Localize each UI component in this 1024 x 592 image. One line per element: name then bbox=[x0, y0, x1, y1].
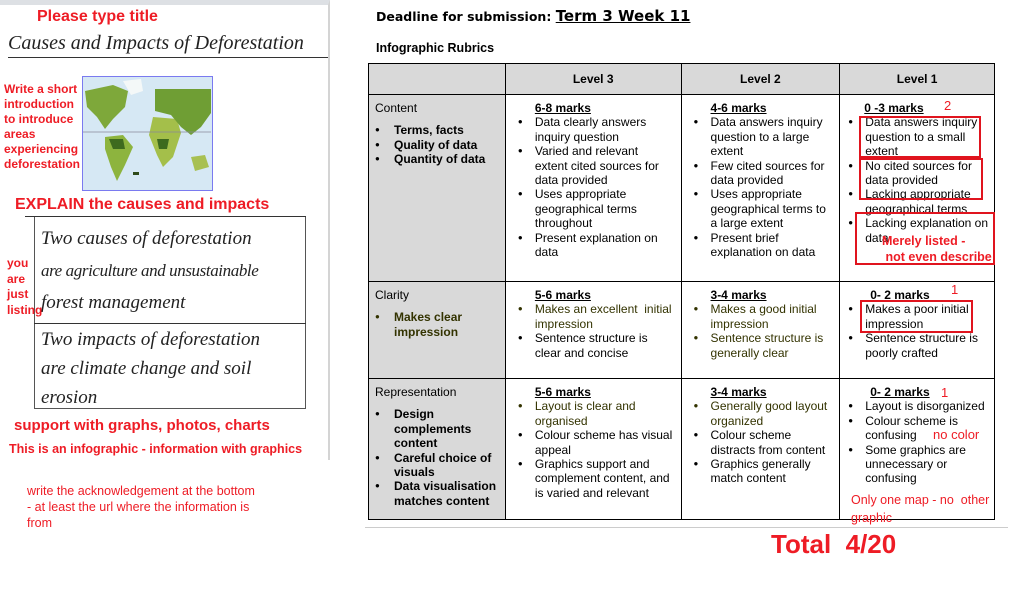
rubric table: Colour scheme has visual appeal bbox=[535, 428, 672, 457]
rubric table: Careful choice of visuals bbox=[394, 451, 491, 479]
rubric table: Data visualisation matches content bbox=[394, 479, 496, 508]
rubric table: Present explanation on data bbox=[535, 231, 658, 259]
rubric table: 3-4 marks bbox=[711, 385, 767, 399]
rubric table: 0- 2 marks bbox=[870, 385, 930, 399]
rubric table: Generally good layout organized bbox=[711, 399, 827, 428]
rubric table: Quantity of data bbox=[394, 152, 485, 166]
comment: you are just listing: listing bbox=[7, 302, 42, 316]
annotation: merely listed: not even describe bbox=[885, 250, 992, 264]
rubric table: Design complements content bbox=[394, 407, 471, 450]
rubric table: Data answers inquiry question to a large extent bbox=[711, 115, 823, 158]
handwritten impacts text: erosion bbox=[41, 387, 97, 408]
total score: Total 4/20 bbox=[771, 529, 896, 559]
rubric table: Layout is clear and organised bbox=[535, 399, 636, 428]
rubric table: Makes a good initial impression bbox=[711, 302, 817, 331]
instruction: introduction: Write a short bbox=[4, 82, 77, 96]
rubric table: 5-6 marks bbox=[535, 385, 591, 399]
annotation: merely listed bbox=[882, 234, 992, 264]
text: 1 bbox=[941, 385, 948, 400]
rubric table: Data clearly answers inquiry question bbox=[535, 115, 646, 144]
handwritten impacts text bbox=[41, 329, 260, 408]
rubric table: Layout is disorganized bbox=[865, 399, 985, 413]
rubric table: Clarity bbox=[375, 288, 409, 302]
handwritten causes text bbox=[41, 228, 258, 313]
handwritten causes text: are agriculture and unsustainable bbox=[41, 261, 258, 280]
rubric table: Makes a poor initial impression bbox=[865, 302, 969, 331]
rubric table: Sentence structure is poorly crafted bbox=[865, 331, 978, 360]
comment: you are just listing: you bbox=[7, 256, 28, 270]
handwritten causes and impacts box bbox=[25, 216, 306, 409]
rubric table: Level 3 bbox=[573, 72, 614, 86]
instruction: acknowledgement bbox=[27, 484, 255, 530]
rubric table: Lacking appropriate geographical terms bbox=[865, 187, 971, 216]
handwritten title bbox=[8, 28, 328, 58]
handwritten title: Causes and Impacts of Deforestation bbox=[8, 32, 304, 54]
comment: you are just listing bbox=[6, 256, 42, 316]
world map bbox=[82, 76, 213, 191]
rubric table: Colour scheme is confusing bbox=[865, 414, 958, 442]
rubric table: Present brief explanation on data bbox=[711, 231, 815, 259]
rubric table: Lacking explanation on data bbox=[865, 216, 988, 245]
rubric table: 0- 2 marks bbox=[870, 288, 930, 302]
deadline heading: Deadline for submission: Term 3 Week 11 bbox=[376, 7, 690, 25]
rubric table: Graphics support and complement content, and is varied and relevant bbox=[535, 457, 670, 500]
rubric table: Makes clear impression bbox=[394, 310, 462, 339]
rubric table: Content bbox=[375, 101, 417, 115]
annotation: merely listed: Merely listed - bbox=[882, 234, 965, 248]
heading: explain causes and impacts: EXPLAIN the causes and impacts bbox=[15, 196, 269, 213]
rubric table: Quality of data bbox=[394, 138, 477, 152]
instruction: support with graphs: support with graphs, photos, charts bbox=[14, 417, 270, 434]
annotation: no color: no color bbox=[933, 427, 979, 442]
instruction: introduction: deforestation bbox=[4, 157, 80, 171]
rubric table: Graphics generally match content bbox=[711, 457, 811, 485]
instruction: acknowledgement: write the acknowledgement at the bottom bbox=[27, 484, 255, 498]
annotation boxes on level 1 bbox=[859, 116, 981, 158]
rubric table: 0 -3 marks bbox=[864, 101, 924, 115]
annotation: only one map: Only one map - no other graphic bbox=[851, 493, 989, 525]
rubric table: Uses appropriate geographical terms to a large extent bbox=[711, 187, 826, 230]
rubric table: Level 1 bbox=[897, 72, 937, 86]
rubric table: 5-6 marks bbox=[535, 288, 591, 302]
rubric table: Varied and relevant bbox=[535, 144, 638, 158]
rubric heading: Infographic Rubrics bbox=[376, 41, 494, 55]
rubric table: Terms, facts bbox=[394, 123, 464, 137]
rubric table: Sentence structure is clear and concise bbox=[535, 331, 648, 360]
rubric table: extent cited sources for bbox=[535, 159, 659, 173]
rubric table: Uses appropriate geographical terms throughout bbox=[535, 187, 637, 230]
divider bbox=[365, 527, 1008, 528]
instruction: acknowledgement: - at least the url where the information is bbox=[27, 500, 249, 514]
rubric table: Sentence structure is generally clear bbox=[711, 331, 823, 360]
instruction: infographic: This is an infographic - information with graphics bbox=[9, 442, 302, 456]
rubric table bbox=[368, 63, 995, 520]
comment: you are just listing: are bbox=[7, 272, 25, 286]
rubric table: Level 2 bbox=[740, 72, 781, 86]
heading: please type title: Please type title bbox=[37, 8, 158, 25]
instruction: introduction: to introduce bbox=[4, 112, 73, 126]
rubric table: 4-6 marks bbox=[711, 101, 767, 115]
rubric table: Colour scheme distracts from content bbox=[711, 428, 825, 457]
comment: you are just listing: just bbox=[7, 287, 28, 301]
rubric table: Makes an excellent initial impression bbox=[535, 302, 672, 331]
rubric table: Data answers inquiry question to a small extent bbox=[865, 115, 977, 158]
rubric table: Representation bbox=[375, 385, 456, 399]
annotation scores: 2 bbox=[944, 98, 951, 113]
handwritten impacts text: are climate change and soil bbox=[41, 358, 251, 379]
handwritten impacts text: Two impacts of deforestation bbox=[41, 329, 260, 350]
instruction: acknowledgement: from bbox=[27, 516, 52, 530]
rubric table: Few cited sources for data provided bbox=[711, 159, 825, 187]
instruction: introduction bbox=[4, 82, 80, 171]
rubric table: No cited sources for data provided bbox=[865, 159, 972, 187]
instruction: introduction: areas bbox=[4, 127, 35, 141]
rubric table: data provided bbox=[535, 173, 608, 187]
instruction: introduction: introduction bbox=[4, 97, 74, 111]
rubric table: Some graphics are unnecessary or confusing bbox=[865, 443, 966, 485]
rubric table: 3-4 marks bbox=[711, 288, 767, 302]
rubric table: 6-8 marks bbox=[535, 101, 591, 115]
handwritten causes text: Two causes of deforestation bbox=[41, 228, 252, 249]
handwritten causes text: forest management bbox=[41, 292, 185, 313]
text: 1 bbox=[951, 282, 958, 297]
instruction: introduction: experiencing bbox=[4, 142, 78, 156]
left panel frame bbox=[0, 0, 330, 460]
